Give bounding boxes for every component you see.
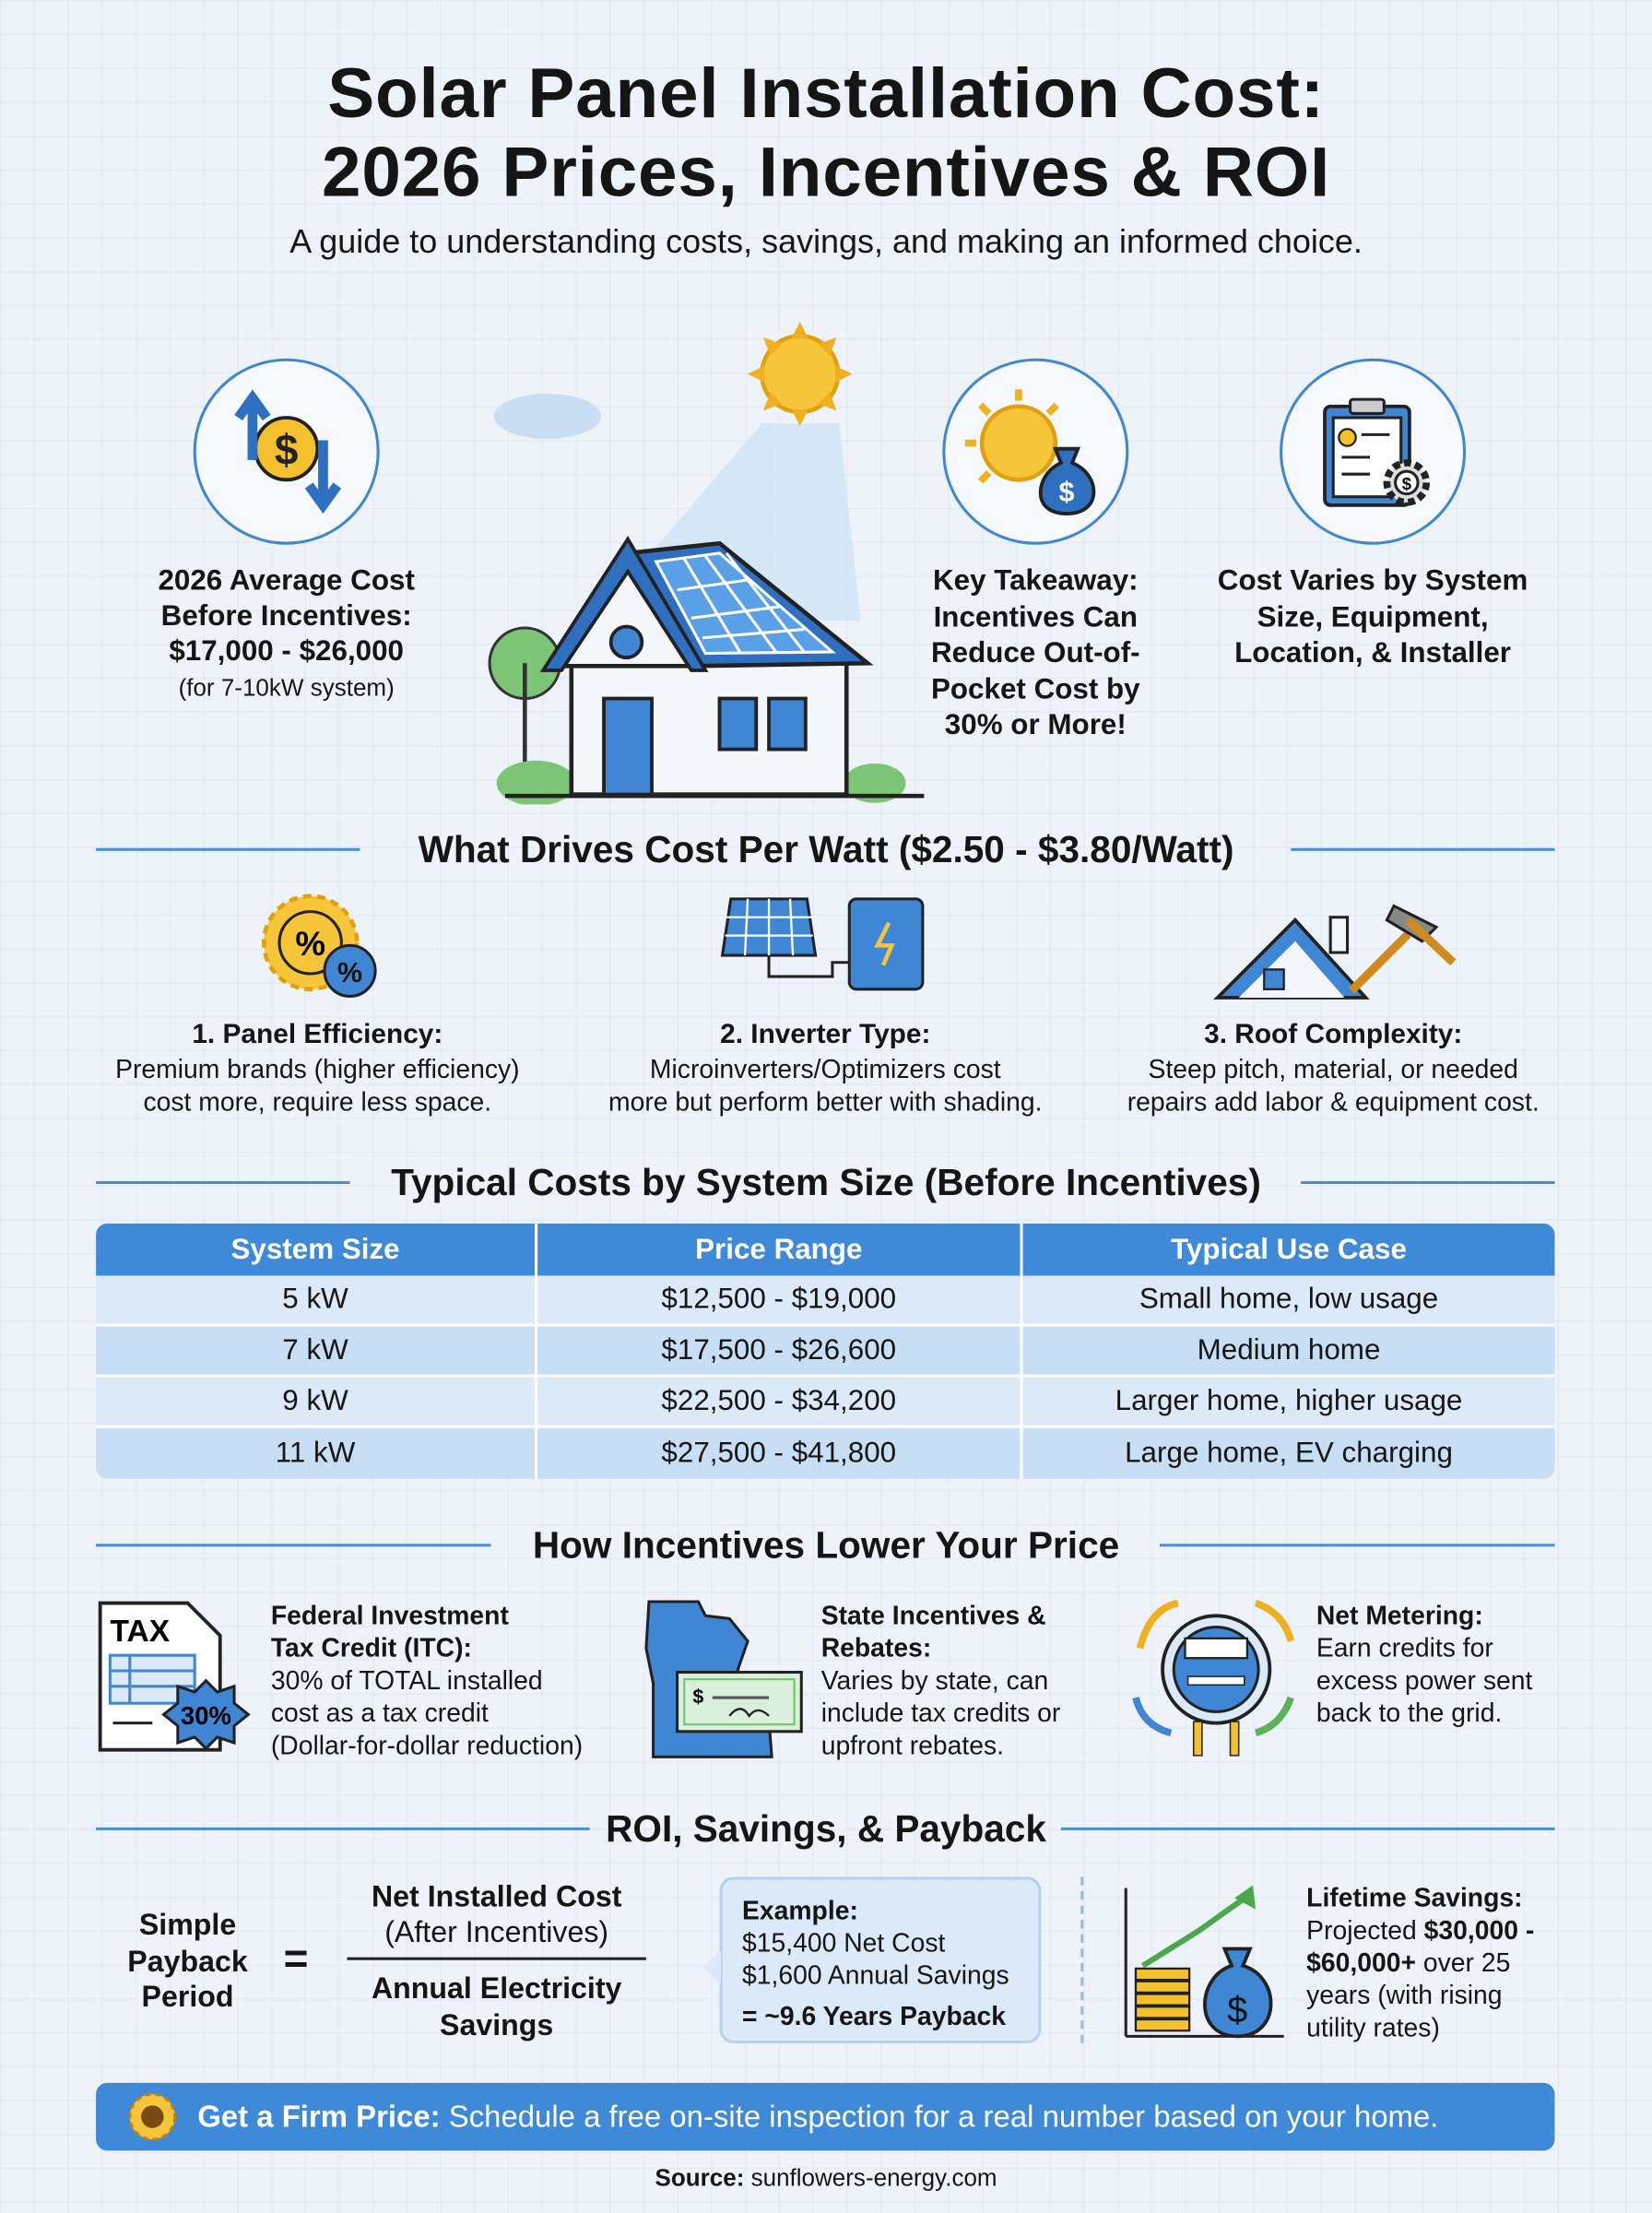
callout: example: [720, 1876, 1041, 2043]
callout: example: = ~9.6 Years Payback: [742, 2001, 1006, 2030]
CTA banner: [96, 2083, 1555, 2150]
table: system sizes: [96, 1223, 1554, 1479]
table: system sizes: 9 kW: [282, 1384, 348, 1417]
table: system sizes: $17,500 - $26,600: [661, 1333, 896, 1366]
text: roof complexity: Steep pitch, material, or needed: [1149, 1053, 1518, 1083]
text: federal ITC: Tax Credit (ITC):: [271, 1633, 472, 1663]
heading: ROI: ROI, Savings, & Payback: [606, 1807, 1046, 1850]
icon: tax form: TAX: [110, 1615, 171, 1649]
chart: lifetime savings icon: [1125, 1885, 1284, 2038]
icon: panel efficiency: %: [295, 925, 325, 963]
callout: example: $15,400 Net Cost: [742, 1928, 945, 1958]
heading: typical costs: Typical Costs by System Size (Before Incentives): [391, 1162, 1261, 1203]
title: Solar Panel Installation Cost:: [327, 53, 1325, 133]
chart: lifetime savings icon: $: [1227, 1990, 1247, 2030]
CTA banner: Get a Firm Price: Schedule a free on-site inspection for a real number based on your home.: [197, 2100, 1438, 2134]
icon: panel efficiency: [262, 894, 377, 998]
callout: example: Example:: [742, 1895, 858, 1924]
source: Source: sunflowers-energy.com: [655, 2165, 997, 2192]
icon: sunflower: [128, 2093, 177, 2141]
table: system sizes: Medium home: [1198, 1333, 1380, 1366]
table: system sizes: 11 kW: [276, 1437, 355, 1469]
icon: inverter: [721, 897, 924, 990]
callout: example: $1,600 Annual Savings: [742, 1960, 1009, 1990]
subtitle: A guide to understanding costs, savings, and making an informed choice.: [289, 223, 1363, 260]
text: payback formula: Simple Payback Period: [127, 1910, 248, 2014]
text: panel efficiency: Premium brands (higher efficiency) cost more, require less space.: [115, 1053, 520, 1117]
text: state incentives: State Incentives & Rebates:: [821, 1600, 1046, 1663]
heading: what drives cost: What Drives Cost Per Watt ($2.50 - $3.80/Watt): [419, 828, 1234, 870]
icon: tax form: 30%: [181, 1701, 231, 1730]
icon: cost arrows circle: $: [275, 426, 298, 474]
icon: tax form: [98, 1601, 251, 1752]
text: state incentives: Varies by state, can include tax credits or upfront rebates.: [821, 1665, 1060, 1759]
text: federal ITC: 30% of TOTAL installed: [271, 1665, 543, 1695]
text: payback formula: Net Installed Cost: [372, 1881, 621, 1913]
icon: panel efficiency: %: [337, 957, 362, 988]
text: inverter type: 2. Inverter Type:: [720, 1019, 930, 1050]
icon: sun and money bag circle: $: [1058, 476, 1074, 507]
text: cost varies: Cost Varies by System Size, Equipment, Location, & Installer: [1218, 564, 1528, 669]
illustration: house with sun: [489, 322, 924, 804]
table: system sizes: $27,500 - $41,800: [661, 1437, 896, 1469]
text: payback formula: =: [284, 1936, 308, 1982]
title: 2026 Prices, Incentives & ROI: [322, 133, 1330, 212]
table: system sizes: $12,500 - $19,000: [661, 1283, 896, 1315]
table: system sizes: Typical Use Case: [1171, 1233, 1407, 1265]
table: system sizes: $22,500 - $34,200: [661, 1384, 896, 1417]
text: roof complexity: 3. Roof Complexity:: [1204, 1019, 1462, 1050]
text: net metering: Earn credits for excess power sent back to the grid.: [1316, 1633, 1532, 1727]
text: lifetime savings: Lifetime Savings:: [1306, 1883, 1523, 1912]
table: system sizes: Small home, low usage: [1139, 1283, 1438, 1315]
text: payback formula: (After Incentives): [384, 1916, 608, 1948]
title: [322, 53, 1330, 212]
table: system sizes: Large home, EV charging: [1125, 1437, 1453, 1469]
text: panel efficiency: [115, 1019, 520, 1117]
icon: sun and money bag circle: [942, 359, 1128, 545]
text: key takeaway: Key Takeaway: Incentives Can Reduce Out-of-Pocket Cost by 30% or More!: [931, 564, 1140, 740]
icon: state map with check: $: [692, 1686, 703, 1708]
text: federal ITC: Federal Investment: [271, 1600, 509, 1630]
heading: incentives: How Incentives Lower Your Price: [533, 1524, 1119, 1567]
text: federal ITC: cost as a tax credit: [271, 1698, 489, 1727]
text: inverter type: Microinverters/Optimizers cost: [650, 1053, 1001, 1083]
text: net metering: Net Metering:: [1316, 1600, 1483, 1630]
text: payback formula: [127, 1881, 646, 2041]
icon: clipboard gear circle: [1280, 359, 1466, 545]
table: system sizes: Larger home, higher usage: [1115, 1384, 1462, 1417]
table: system sizes: 7 kW: [282, 1333, 348, 1366]
text: roof complexity: repairs add labor & equipment cost.: [1127, 1086, 1540, 1117]
icon: net meter: [1132, 1599, 1294, 1757]
text: federal ITC: (Dollar-for-dollar reduction): [271, 1730, 583, 1759]
table: system sizes: 5 kW: [282, 1283, 348, 1315]
icon: state map with check: [644, 1601, 803, 1758]
text: payback formula: Annual Electricity Savings: [372, 1972, 621, 2041]
icon: roof complexity: [1213, 904, 1457, 1000]
text: state incentives: [820, 1600, 1060, 1759]
text: roof complexity: [1127, 1019, 1540, 1117]
icon: cost arrows circle: [194, 359, 380, 545]
text: panel efficiency: 1. Panel Efficiency:: [192, 1019, 442, 1050]
table: system sizes: System Size: [230, 1233, 400, 1265]
icon: clipboard gear circle: $: [1402, 474, 1411, 493]
text: average cost: 2026 Average Cost Before Incentives: $17,000 - $26,000: [158, 564, 415, 668]
text: average cost: (for 7-10kW system): [179, 675, 395, 702]
table: system sizes: Price Range: [695, 1233, 862, 1265]
text: inverter type: [608, 1019, 1043, 1117]
text: inverter type: more but perform better with shading.: [608, 1086, 1043, 1117]
text: federal ITC: [271, 1600, 583, 1759]
text: lifetime savings: Projected $30,000 - $60,000+ over 25 years (with rising utility rates): [1306, 1915, 1534, 2041]
